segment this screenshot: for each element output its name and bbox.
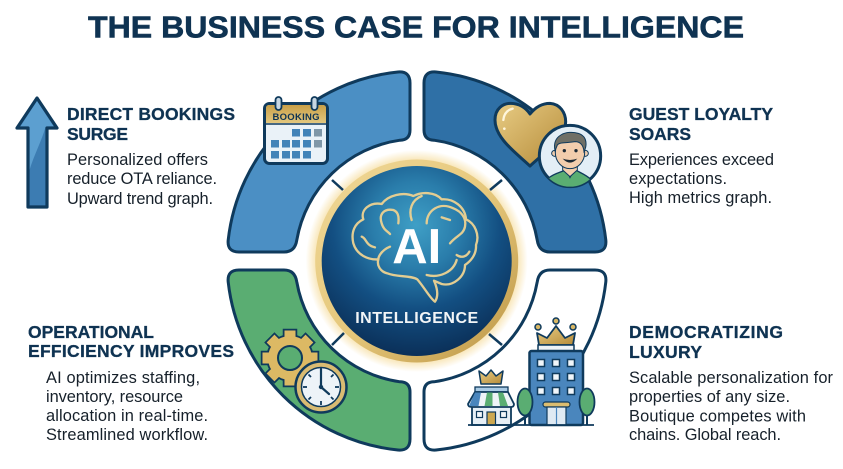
text block: guest loyalty: expectations. (629, 170, 727, 188)
text block: operational efficiency: EFFICIENCY IMPROVES (28, 341, 234, 361)
label: AI: AI (392, 220, 441, 274)
text block: democratizing luxury: chains. Global reach. (629, 426, 781, 444)
icon: gear (262, 330, 318, 386)
text block: operational efficiency: Streamlined workflow. (46, 426, 208, 444)
text block: guest loyalty (629, 104, 774, 207)
panel: guest loyalty segment (424, 72, 606, 252)
text block: operational efficiency: OPERATIONAL (28, 322, 154, 342)
text block: direct bookings: Personalized offers (67, 151, 208, 169)
text block: guest loyalty: High metrics graph. (629, 189, 772, 207)
icon: brain (353, 193, 477, 302)
text block: operational efficiency: AI optimizes staffing, (46, 369, 200, 387)
text block: guest loyalty: SOARS (629, 124, 691, 144)
text block: guest loyalty: Experiences exceed (629, 151, 774, 169)
icon: trees (518, 388, 594, 425)
text block: operational efficiency: inventory, resource (46, 388, 183, 406)
icon: hotel tower (530, 318, 583, 425)
text block: democratizing luxury: properties of any size. (629, 388, 790, 406)
text block: direct bookings: DIRECT BOOKINGS (67, 104, 235, 124)
icon: guest avatar (539, 125, 601, 190)
icon: clock (296, 362, 346, 412)
text block: direct bookings (67, 104, 235, 208)
icon: upward arrow (17, 98, 57, 207)
text block: guest loyalty: GUEST LOYALTY (629, 104, 773, 124)
text block: direct bookings: SURGE (67, 124, 128, 144)
icon: boutique shop (468, 370, 514, 425)
icon: gold heart (495, 103, 566, 166)
panel: democratizing luxury segment (424, 270, 606, 450)
panel: operational efficiency segment (228, 270, 410, 450)
text block: democratizing luxury: DEMOCRATIZING (629, 322, 783, 342)
text block: operational efficiency (28, 322, 234, 444)
connectors (332, 180, 502, 345)
label: intelligence: INTELLIGENCE (355, 310, 479, 327)
text block: democratizing luxury: Scalable personalization for (629, 369, 834, 387)
text block: operational efficiency: allocation in real-time. (46, 407, 208, 425)
text block: democratizing luxury: LUXURY (629, 342, 702, 362)
panel: direct bookings segment (228, 72, 410, 252)
text block: democratizing luxury (629, 322, 834, 444)
icon: booking calendar (264, 97, 328, 164)
text block: direct bookings: reduce OTA reliance. (67, 170, 217, 188)
icon: hotel and boutique (468, 318, 594, 425)
text block: democratizing luxury: Boutique competes with (629, 408, 806, 426)
icon: booking calendar: BOOKING (272, 112, 320, 123)
text block: direct bookings: Upward trend graph. (67, 190, 213, 208)
title: THE BUSINESS CASE FOR INTELLIGENCE (88, 10, 744, 44)
center hub: AI intelligence (306, 150, 528, 372)
